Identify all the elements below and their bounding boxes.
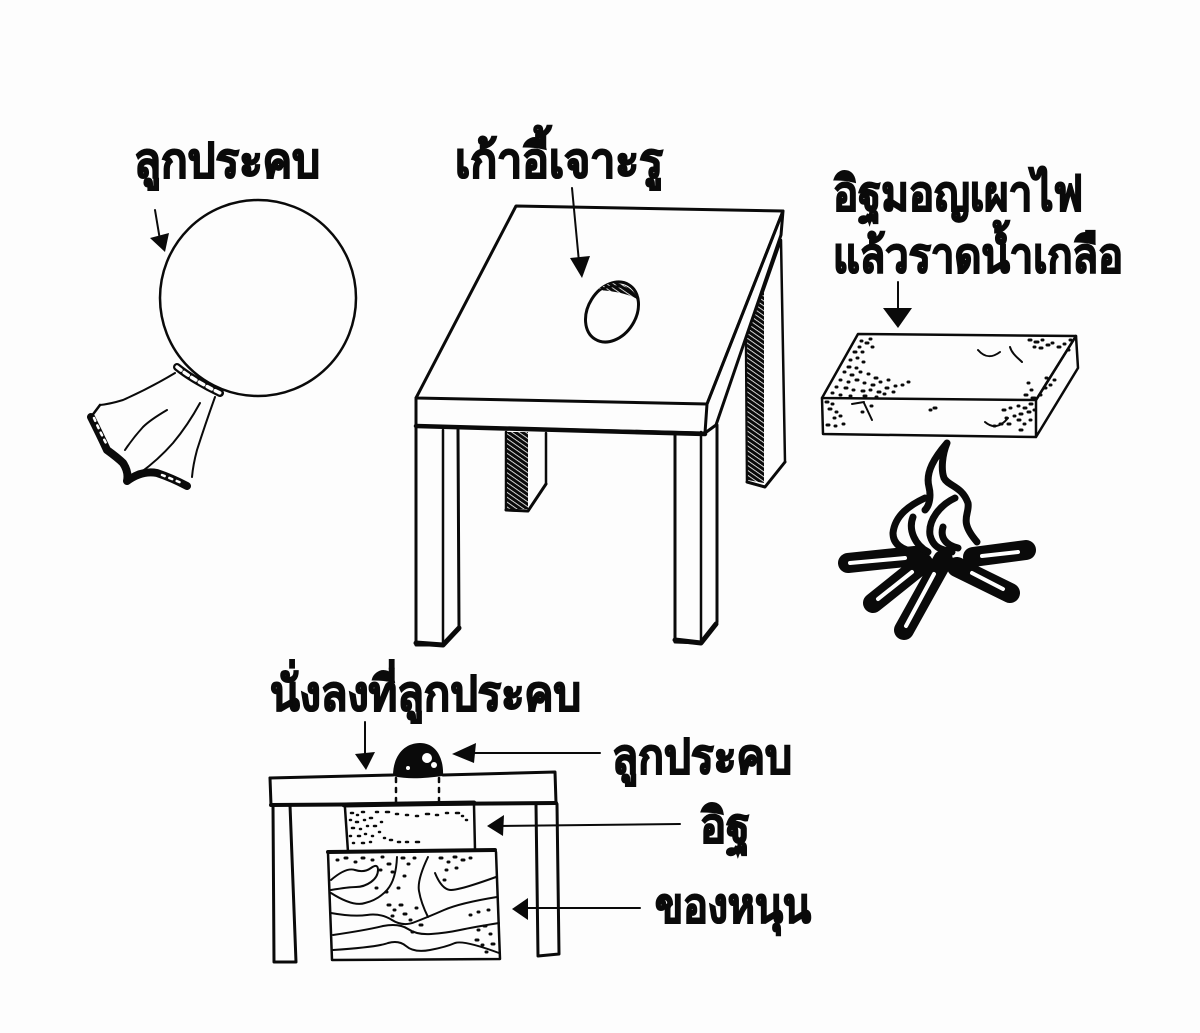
panel: fired brick	[822, 165, 1123, 630]
panel: sitting setup diagram	[270, 659, 811, 962]
arrow: to brick	[487, 815, 680, 836]
label: compress: ลูกประคบ	[612, 731, 792, 787]
icon: brick	[822, 334, 1078, 437]
label: brick: อิฐ	[700, 800, 750, 857]
arrow: to herbal compress	[150, 210, 169, 252]
front left leg	[416, 428, 459, 645]
back leg	[506, 432, 546, 511]
flames	[893, 443, 977, 552]
icon: tied cloth	[91, 367, 220, 486]
icon: brick in section	[344, 803, 475, 852]
hole	[575, 272, 649, 352]
icon: chair	[416, 206, 785, 645]
far right leg	[746, 240, 785, 487]
arrow: to hole	[570, 188, 590, 278]
heading: fired brick with salt water: แล้วราดน้ำเกลือ	[833, 220, 1123, 283]
icon: pile of herbs	[328, 850, 500, 960]
heading: sit on the compress: นั่งลงที่ลูกประคบ	[270, 659, 581, 724]
arrow: to brick	[883, 282, 912, 328]
heading: drilled chair: เก้าอี้เจาะรู	[455, 125, 663, 191]
arrow: to compress	[452, 743, 600, 763]
label: herbs: ของหนุน	[655, 880, 811, 936]
panel: herbal compress	[91, 135, 356, 486]
icon: compress ball	[160, 200, 356, 396]
heading: herbal compress: ลูกประคบ	[134, 135, 320, 191]
arrow: to herbs	[512, 898, 640, 920]
heading: fired brick with salt water	[833, 165, 1123, 283]
heading: fired brick with salt water: อิฐมอญเผาไฟ	[833, 165, 1083, 225]
icon: chair side view	[270, 772, 559, 962]
stipple	[826, 339, 1071, 430]
arrow: to seat	[355, 722, 375, 770]
icon: fire	[848, 443, 1026, 630]
icon: compress on chair	[393, 743, 443, 802]
panel: chair with hole	[416, 125, 785, 645]
front right leg	[675, 425, 717, 643]
logs	[848, 550, 1026, 630]
